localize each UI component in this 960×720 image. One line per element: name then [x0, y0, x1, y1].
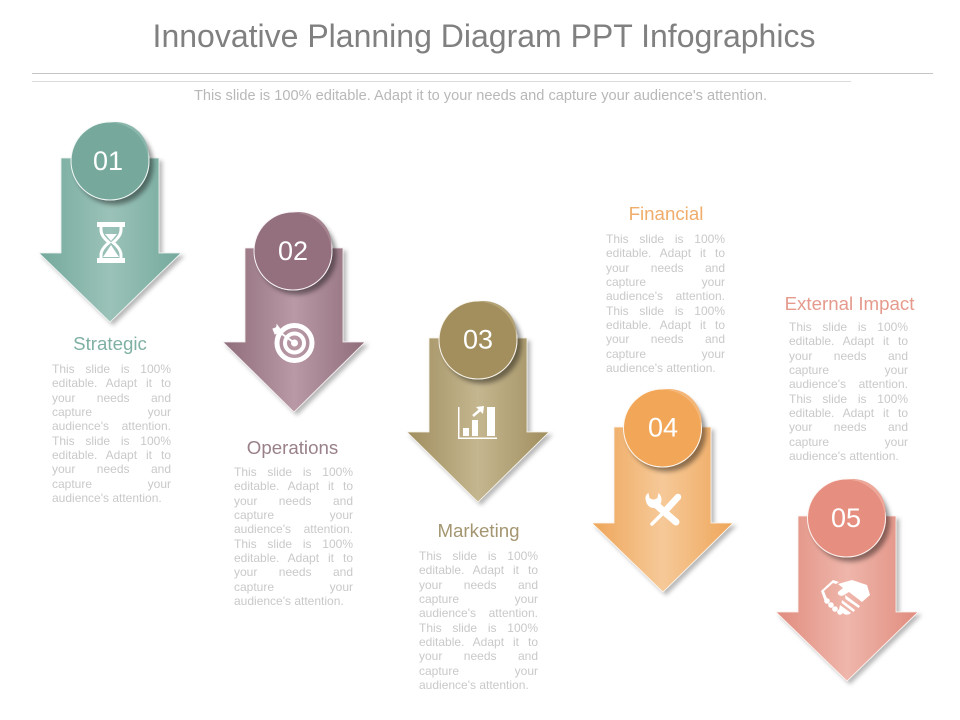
- body text: external impact: editable. Adapt it to: [789, 334, 908, 348]
- arrow 03 with bar chart icon: [406, 300, 553, 506]
- body text: external impact: This slide is 100%: [789, 320, 908, 334]
- arrow 01 with hourglass icon: [38, 122, 185, 326]
- body text: financial: editable. Adapt it to: [606, 246, 725, 260]
- arrow 03 with bar chart icon: 03: [463, 324, 493, 354]
- title: Innovative Planning Diagram PPT Infographics: [153, 18, 815, 54]
- arrow 05 with handshake icon: [776, 478, 922, 686]
- body text: financial: This slide is 100%: [606, 232, 725, 246]
- body text: operations: editable. Adapt it to: [234, 479, 353, 493]
- panel: external impact: [776, 293, 922, 686]
- arrow 02 with target icon: [222, 212, 369, 416]
- body text: marketing: editable. Adapt it to: [419, 563, 538, 577]
- panel: operations: [222, 212, 369, 608]
- body text: strategic: editable. Adapt it to: [52, 448, 171, 462]
- body text: strategic: editable. Adapt it to: [52, 376, 171, 390]
- body text: strategic: This slide is 100%: [52, 434, 171, 448]
- body text: financial: capture your: [606, 275, 725, 289]
- heading: financial: Financial: [629, 203, 703, 224]
- body text: strategic: This slide is 100%: [52, 362, 171, 376]
- heading: operations: Operations: [247, 437, 338, 458]
- body text: strategic: capture your: [52, 405, 171, 419]
- body text: strategic: [52, 362, 171, 505]
- heading: strategic: Strategic: [73, 333, 147, 354]
- panel: marketing: [406, 300, 553, 692]
- body text: marketing: This slide is 100%: [419, 621, 538, 635]
- body text: external impact: capture your: [789, 363, 908, 377]
- panel: financial: [592, 203, 737, 596]
- heading: marketing: Marketing: [437, 520, 520, 541]
- body text: operations: This slide is 100%: [234, 465, 353, 479]
- body text: financial: capture your: [606, 347, 725, 361]
- body text: operations: capture your: [234, 580, 353, 594]
- body text: external impact: audience's attention.: [789, 449, 899, 463]
- body text: marketing: [419, 549, 538, 692]
- subtitle: This slide is 100% editable. Adapt it to your needs and capture your audience's attention.: [194, 88, 767, 104]
- panel: strategic: [38, 122, 185, 505]
- body text: strategic: your needs and: [52, 391, 171, 405]
- body text: operations: capture your: [234, 508, 353, 522]
- body text: strategic: your needs and: [52, 462, 171, 476]
- body text: marketing: your needs and: [419, 649, 538, 663]
- body text: external impact: audience's attention.: [789, 377, 908, 391]
- body text: financial: audience's attention.: [606, 289, 725, 303]
- body text: marketing: capture your: [419, 592, 538, 606]
- body text: external impact: your needs and: [789, 349, 908, 363]
- body text: marketing: audience's attention.: [419, 678, 529, 692]
- arrow 04 with tools icon: [592, 388, 737, 596]
- body text: external impact: capture your: [789, 435, 908, 449]
- body text: external impact: This slide is 100%: [789, 392, 908, 406]
- body text: financial: [606, 232, 725, 375]
- arrow 05 with handshake icon: 05: [831, 503, 861, 533]
- body text: financial: editable. Adapt it to: [606, 318, 725, 332]
- arrow 04 with tools icon: 04: [648, 412, 678, 442]
- body text: external impact: [789, 320, 908, 463]
- body text: financial: audience's attention.: [606, 361, 716, 375]
- body text: external impact: editable. Adapt it to: [789, 406, 908, 420]
- body text: strategic: audience's attention.: [52, 419, 171, 433]
- body text: marketing: your needs and: [419, 578, 538, 592]
- body text: marketing: capture your: [419, 664, 538, 678]
- body text: operations: your needs and: [234, 494, 353, 508]
- body text: operations: audience's attention.: [234, 594, 344, 608]
- body text: marketing: audience's attention.: [419, 606, 538, 620]
- body text: financial: your needs and: [606, 332, 725, 346]
- body text: financial: your needs and: [606, 261, 725, 275]
- body text: operations: This slide is 100%: [234, 537, 353, 551]
- body text: external impact: your needs and: [789, 420, 908, 434]
- body text: operations: your needs and: [234, 565, 353, 579]
- arrow 02 with target icon: 02: [278, 236, 308, 266]
- body text: operations: editable. Adapt it to: [234, 551, 353, 565]
- body text: financial: This slide is 100%: [606, 304, 725, 318]
- body text: operations: [234, 465, 353, 608]
- body text: marketing: This slide is 100%: [419, 549, 538, 563]
- body text: strategic: audience's attention.: [52, 491, 162, 505]
- body text: strategic: capture your: [52, 477, 171, 491]
- body text: marketing: editable. Adapt it to: [419, 635, 538, 649]
- heading: external impact: External Impact: [785, 293, 914, 314]
- arrow 01 with hourglass icon: 01: [93, 146, 123, 176]
- body text: operations: audience's attention.: [234, 522, 353, 536]
